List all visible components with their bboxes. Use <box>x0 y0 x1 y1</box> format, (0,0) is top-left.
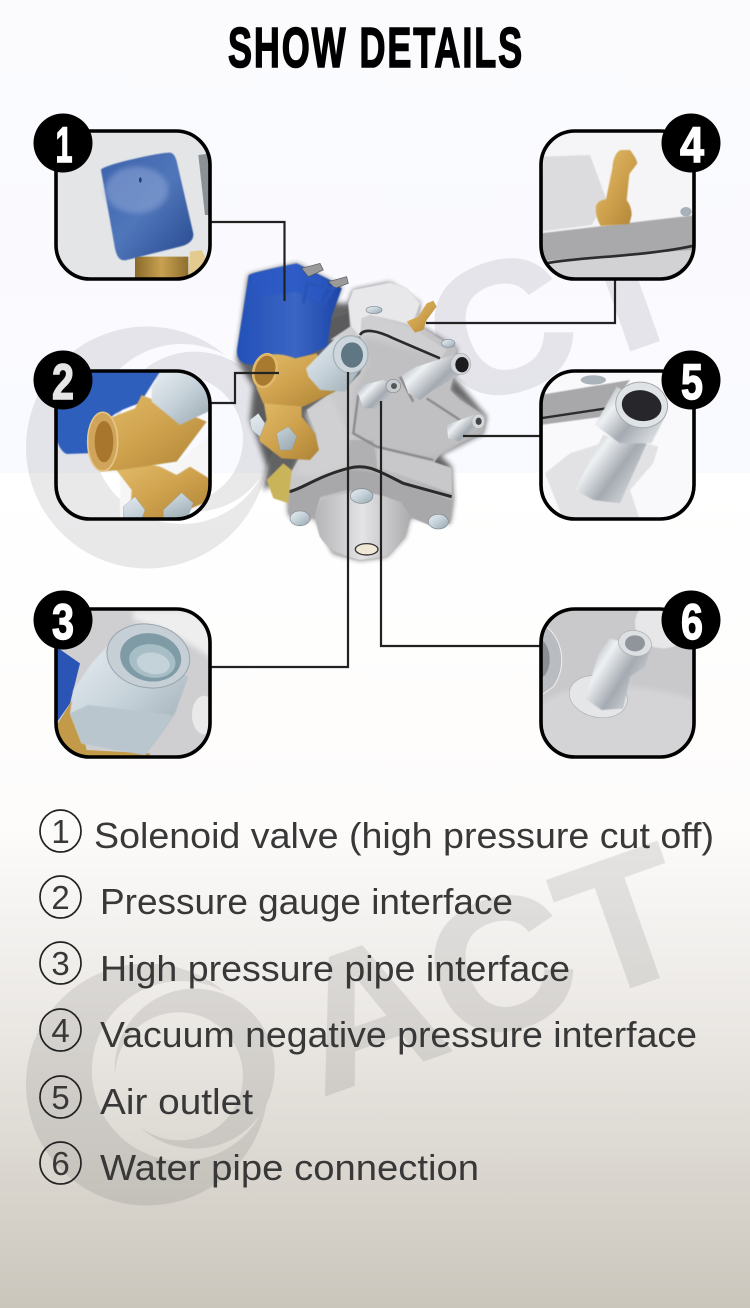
aluminium body silhouette <box>288 283 487 560</box>
legend item 5: 5 <box>51 1079 70 1116</box>
legend item 6: 6 <box>51 1145 70 1182</box>
seal lower <box>289 467 452 497</box>
thumbnail 5 <box>542 375 668 518</box>
panel 2 border <box>56 371 210 519</box>
rear brass bolt <box>267 463 292 503</box>
panel 3: high pressure pipe interface <box>34 590 216 758</box>
badge 2 <box>34 350 92 410</box>
legend item 3: High pressure pipe interface <box>100 948 570 989</box>
seal top <box>360 331 440 358</box>
legend item 6: Water pipe connection <box>100 1147 479 1188</box>
brass port <box>250 352 280 390</box>
badge 3 <box>34 590 92 650</box>
badge 1 <box>34 114 92 173</box>
yoke bolts <box>250 413 297 450</box>
badge 4: 4 <box>680 117 704 173</box>
connector lines <box>210 222 615 667</box>
title: SHOW DETAILS <box>228 16 524 80</box>
legend item 5 <box>40 1076 253 1122</box>
body crease shadows <box>353 377 460 460</box>
watermark: upper ACT logo: ACT <box>267 168 714 497</box>
panel 3 border <box>56 609 210 757</box>
brass nipple <box>407 301 437 333</box>
top cover face <box>348 283 420 337</box>
badge 2: 2 <box>52 354 74 410</box>
bottom plug <box>355 544 378 555</box>
thumbnail 3 <box>56 609 216 758</box>
legend item 4: 4 <box>51 1012 70 1049</box>
coil connectors <box>302 263 348 288</box>
badge 3: 3 <box>52 594 74 650</box>
coil top face <box>249 264 328 303</box>
badge 6 <box>662 590 720 650</box>
legend list <box>40 810 714 1188</box>
badge 6: 6 <box>681 594 703 650</box>
brass fitting <box>253 353 335 407</box>
legend item 4: Vacuum negative pressure interface <box>100 1014 697 1055</box>
watermark: upper ACT logo <box>26 168 714 569</box>
panel 2: pressure gauge interface <box>34 350 212 520</box>
center column <box>348 440 377 493</box>
coil clip <box>303 283 333 310</box>
product shadow halo <box>237 263 487 560</box>
legend item 1: 1 <box>51 813 70 850</box>
barb fitting 6 <box>357 380 398 408</box>
mid body plate <box>353 337 483 457</box>
badge 5 <box>662 350 720 410</box>
thumbnail 1 <box>56 131 212 280</box>
legend item 3: 3 <box>51 945 70 982</box>
barb fitting outlet <box>447 415 483 442</box>
badge 5: 5 <box>681 354 703 410</box>
badge 1: 1 <box>56 117 72 173</box>
legend item 1: Solenoid valve (high pressure cut off) <box>94 815 714 856</box>
left body side <box>293 395 350 477</box>
solenoid coil <box>237 263 342 365</box>
product: gas pressure reducer <box>237 263 487 560</box>
legend item 2: 2 <box>51 879 70 916</box>
panel 5 border <box>541 371 694 519</box>
panel 1 border <box>56 131 210 279</box>
legend item 5: Air outlet <box>100 1081 253 1122</box>
barb fitting 5 <box>402 355 468 400</box>
legend item 2: Pressure gauge interface <box>100 881 513 922</box>
thumbnail 6 <box>542 610 692 756</box>
panel 4: vacuum negative pressure interface <box>540 114 720 282</box>
panel 1: solenoid valve <box>34 114 212 280</box>
panel 4 border <box>541 131 694 279</box>
brass lower yoke <box>258 400 319 460</box>
panel 6 border <box>541 609 694 757</box>
badge 4 <box>662 114 720 173</box>
watermark: lower ACT logo <box>26 805 714 1206</box>
steel nut <box>306 336 367 392</box>
thumbnail 2 <box>56 372 212 520</box>
panel 6: water pipe connection <box>539 590 720 760</box>
panel 5: air outlet <box>540 350 720 520</box>
lower right band <box>377 448 452 493</box>
bolts <box>290 306 455 529</box>
below seal band <box>288 470 452 527</box>
thumbnail 4 <box>542 149 692 278</box>
bottom dome <box>315 493 410 560</box>
cover front band <box>362 317 447 360</box>
watermark: lower ACT logo: ACT <box>267 805 714 1134</box>
